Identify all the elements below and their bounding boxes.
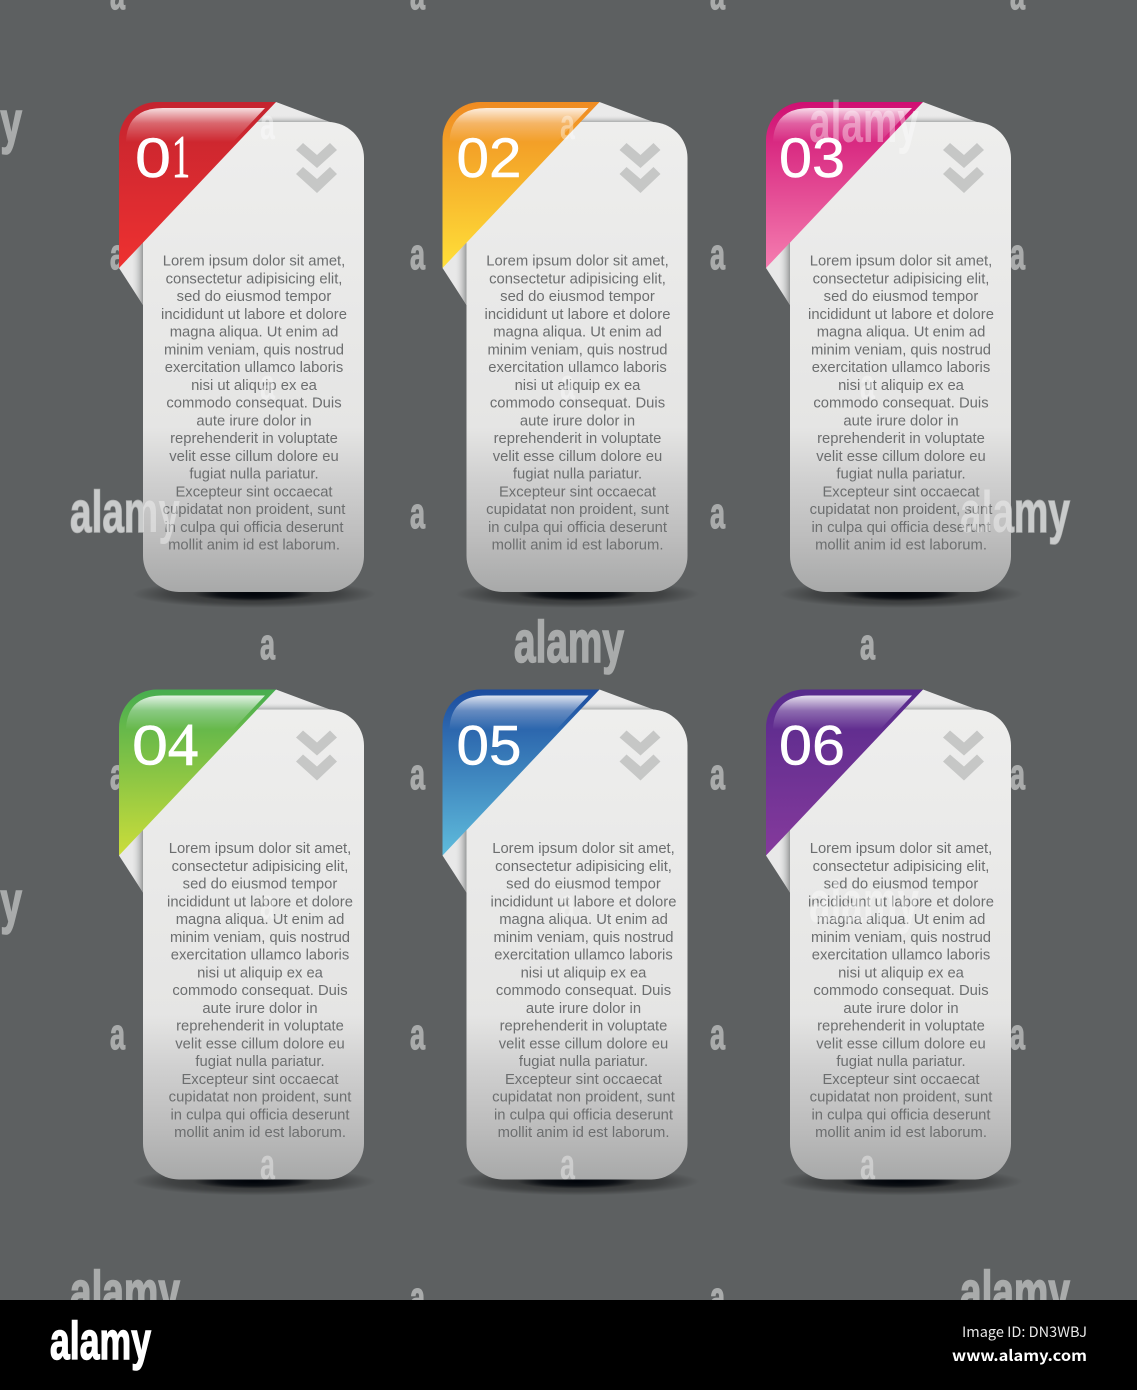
text 01: exercitation ullamco laboris xyxy=(165,360,343,376)
text 01: commodo consequat. Duis xyxy=(166,396,342,412)
watermarks behind cards: a xyxy=(110,1010,125,1059)
watermarks over cards: a xyxy=(260,1140,275,1189)
text 01: velit esse cillum dolore eu xyxy=(169,449,339,465)
text 01: magna aliqua. Ut enim ad xyxy=(170,324,338,340)
card 06 xyxy=(766,690,1023,1196)
card 03 xyxy=(766,102,1023,608)
ribbon 04: 4 xyxy=(168,712,198,778)
text 02: nisi ut aliquip ex ea xyxy=(515,378,641,394)
text 01: in culpa qui officia deserunt xyxy=(164,520,344,536)
watermarks behind cards: a xyxy=(1010,1010,1025,1059)
text 04: consectetur adipisicing elit, xyxy=(172,859,348,875)
text 06: velit esse cillum dolore eu xyxy=(816,1036,986,1052)
text 01: cupidatat non proident, sunt xyxy=(163,502,345,518)
text 06: Excepteur sint occaecat xyxy=(822,1072,980,1088)
text 02: commodo consequat. Duis xyxy=(490,396,665,412)
ribbon 06 xyxy=(766,690,923,856)
text 02: sed do eiusmod tempor xyxy=(500,289,655,305)
text 05: reprehenderit in voluptate xyxy=(500,1018,667,1034)
ribbon 02: 02 xyxy=(456,126,522,189)
watermarks over cards: a xyxy=(860,360,875,409)
text 05: sed do eiusmod tempor xyxy=(506,876,661,892)
ribbon 01: 1 xyxy=(172,124,190,190)
text 04: incididunt ut labore et dolore xyxy=(167,894,353,910)
text 03: reprehenderit in voluptate xyxy=(817,431,985,447)
ribbon 04: 0 xyxy=(132,714,168,776)
text 06: nisi ut aliquip ex ea xyxy=(838,965,965,981)
text 03: mollit anim id est laborum. xyxy=(815,538,987,554)
watermarks over cards: a xyxy=(260,100,275,149)
text 04: Excepteur sint occaecat xyxy=(181,1072,339,1088)
text 04: cupidatat non proident, sunt xyxy=(169,1090,351,1106)
watermarks behind cards: a xyxy=(410,230,425,279)
ribbon 02 xyxy=(442,102,600,268)
ribbon 01: 0 xyxy=(135,126,171,189)
watermarks behind cards: a xyxy=(710,1010,725,1059)
text 03: in culpa qui officia deserunt xyxy=(811,520,991,536)
text 06: mollit anim id est laborum. xyxy=(815,1125,987,1141)
chevrons 03 xyxy=(943,143,984,193)
text 06: reprehenderit in voluptate xyxy=(817,1018,985,1034)
text 04: mollit anim id est laborum. xyxy=(174,1125,346,1141)
text 02: aute irure dolor in xyxy=(520,413,635,429)
text 05: Excepteur sint occaecat xyxy=(505,1072,662,1088)
ribbon 05: 05 xyxy=(456,714,522,776)
text 04: reprehenderit in voluptate xyxy=(176,1018,344,1034)
card 04 xyxy=(119,690,376,1196)
watermarks behind cards: a xyxy=(710,489,725,538)
watermarks over cards: a xyxy=(560,880,575,929)
footer bar: www.alamy.com xyxy=(952,1345,1087,1366)
watermarks behind cards: a xyxy=(410,1010,425,1059)
watermarks over cards: alamy xyxy=(809,90,919,155)
text 01: Excepteur sint occaecat xyxy=(175,484,333,500)
card 05 xyxy=(442,690,700,1196)
text 01: mollit anim id est laborum. xyxy=(168,538,340,554)
chevrons 01 xyxy=(296,143,337,193)
text 03: aute irure dolor in xyxy=(843,413,959,429)
watermarks behind cards: alamy xyxy=(514,610,624,675)
watermarks behind cards: alamy xyxy=(70,1260,180,1325)
watermarks behind cards: a xyxy=(710,230,725,279)
text 04: Lorem ipsum dolor sit amet, xyxy=(169,841,351,857)
text 06: minim veniam, quis nostrud xyxy=(811,930,991,946)
text 01: Lorem ipsum dolor sit amet, xyxy=(163,254,345,270)
text 05: exercitation ullamco laboris xyxy=(494,948,673,964)
text 02: Lorem ipsum dolor sit amet, xyxy=(486,254,669,270)
chevrons 05 xyxy=(620,730,660,780)
text 06: exercitation ullamco laboris xyxy=(812,948,990,964)
text 04: velit esse cillum dolore eu xyxy=(175,1036,345,1052)
watermarks behind cards: a xyxy=(110,750,125,799)
text 03: minim veniam, quis nostrud xyxy=(811,342,991,358)
text 01: aute irure dolor in xyxy=(196,413,312,429)
text 06: Lorem ipsum dolor sit amet, xyxy=(810,841,992,857)
text 05: cupidatat non proident, sunt xyxy=(492,1090,675,1106)
text 03: magna aliqua. Ut enim ad xyxy=(817,324,985,340)
watermarks over cards: alamy xyxy=(960,480,1070,545)
text 05: fugiat nulla pariatur. xyxy=(519,1054,648,1070)
ribbon 05 xyxy=(442,690,600,856)
ribbon 03: 03 xyxy=(779,126,845,189)
text 02: cupidatat non proident, sunt xyxy=(486,502,669,518)
text 04: sed do eiusmod tempor xyxy=(183,876,337,892)
text 02: incididunt ut labore et dolore xyxy=(485,307,670,323)
text 04: commodo consequat. Duis xyxy=(172,983,348,999)
text 06: incididunt ut labore et dolore xyxy=(808,894,994,910)
text 03: fugiat nulla pariatur. xyxy=(836,466,966,482)
watermarks over cards: a xyxy=(260,360,275,409)
text 02: mollit anim id est laborum. xyxy=(492,538,663,554)
watermarks behind cards: a xyxy=(710,750,725,799)
text 04: magna aliqua. Ut enim ad xyxy=(176,912,344,928)
text 03: nisi ut aliquip ex ea xyxy=(838,378,965,394)
text 03: Lorem ipsum dolor sit amet, xyxy=(810,254,992,270)
text 01: incididunt ut labore et dolore xyxy=(161,307,347,323)
text 05: aute irure dolor in xyxy=(526,1001,641,1017)
watermarks behind cards: a xyxy=(710,1273,725,1322)
text 01: sed do eiusmod tempor xyxy=(177,289,331,305)
card 01 xyxy=(119,102,376,608)
text 04: in culpa qui officia deserunt xyxy=(170,1107,350,1123)
text 05: mollit anim id est laborum. xyxy=(498,1125,669,1141)
ribbon 03 xyxy=(766,102,923,268)
text 03: exercitation ullamco laboris xyxy=(812,360,990,376)
text 06: commodo consequat. Duis xyxy=(813,983,989,999)
text 03: sed do eiusmod tempor xyxy=(824,289,978,305)
footer bar: alamy xyxy=(50,1312,151,1371)
text 03: incididunt ut labore et dolore xyxy=(808,307,994,323)
watermarks behind cards: a xyxy=(410,750,425,799)
text 04: aute irure dolor in xyxy=(202,1001,318,1017)
text 06: aute irure dolor in xyxy=(843,1001,959,1017)
text 05: incididunt ut labore et dolore xyxy=(491,894,676,910)
card 02 xyxy=(442,102,700,608)
watermarks over cards xyxy=(70,90,1070,1189)
text 02: reprehenderit in voluptate xyxy=(494,431,661,447)
watermarks over cards: a xyxy=(560,360,575,409)
text 03: commodo consequat. Duis xyxy=(813,396,989,412)
chevrons 06 xyxy=(943,730,984,780)
watermarks behind cards: a xyxy=(1010,750,1025,799)
text 06: consectetur adipisicing elit, xyxy=(813,859,989,875)
watermarks over cards: a xyxy=(860,1140,875,1189)
text 01: minim veniam, quis nostrud xyxy=(164,342,344,358)
text 01: reprehenderit in voluptate xyxy=(170,431,338,447)
text 02: magna aliqua. Ut enim ad xyxy=(493,324,662,340)
text 03: consectetur adipisicing elit, xyxy=(813,271,989,287)
text 04: minim veniam, quis nostrud xyxy=(170,930,350,946)
footer bar xyxy=(0,1300,1137,1390)
text 01: fugiat nulla pariatur. xyxy=(189,466,319,482)
chevrons 04 xyxy=(296,730,337,780)
text 04: fugiat nulla pariatur. xyxy=(195,1054,325,1070)
text 02: velit esse cillum dolore eu xyxy=(493,449,662,465)
text 05: magna aliqua. Ut enim ad xyxy=(499,912,668,928)
chevrons 02 xyxy=(620,143,660,193)
ribbon 04 xyxy=(119,690,276,856)
watermarks behind cards: alamy xyxy=(960,1260,1070,1325)
text 03: Excepteur sint occaecat xyxy=(822,484,980,500)
watermarks behind cards: a xyxy=(410,489,425,538)
watermarks behind cards: a xyxy=(1010,230,1025,279)
text 05: nisi ut aliquip ex ea xyxy=(521,965,647,981)
watermarks behind cards: a xyxy=(860,620,875,669)
text 06: in culpa qui officia deserunt xyxy=(811,1107,991,1123)
text 03: velit esse cillum dolore eu xyxy=(816,449,986,465)
text 04: nisi ut aliquip ex ea xyxy=(197,965,324,981)
text 01: nisi ut aliquip ex ea xyxy=(191,378,318,394)
watermarks over cards: a xyxy=(260,880,275,929)
text 05: velit esse cillum dolore eu xyxy=(499,1036,668,1052)
text 02: exercitation ullamco laboris xyxy=(488,360,667,376)
text 05: minim veniam, quis nostrud xyxy=(493,930,674,946)
text 05: Lorem ipsum dolor sit amet, xyxy=(492,841,675,857)
text 05: consectetur adipisicing elit, xyxy=(495,859,672,875)
text 02: consectetur adipisicing elit, xyxy=(489,271,666,287)
text 02: Excepteur sint occaecat xyxy=(499,484,656,500)
text 06: sed do eiusmod tempor xyxy=(824,876,978,892)
footer bar: Image ID: DN3WBJ xyxy=(962,1321,1087,1342)
watermarks over cards: a xyxy=(560,100,575,149)
text 05: commodo consequat. Duis xyxy=(496,983,671,999)
text 06: cupidatat non proident, sunt xyxy=(810,1090,992,1106)
text 06: fugiat nulla pariatur. xyxy=(836,1054,966,1070)
text 05: in culpa qui officia deserunt xyxy=(494,1107,673,1123)
watermarks over cards: alamy xyxy=(70,480,180,545)
text 03: cupidatat non proident, sunt xyxy=(810,502,992,518)
watermarks over cards: a xyxy=(560,1140,575,1189)
text 01: consectetur adipisicing elit, xyxy=(166,271,342,287)
watermarks behind cards: a xyxy=(410,1273,425,1322)
ribbon 01 xyxy=(119,102,276,268)
text 02: in culpa qui officia deserunt xyxy=(488,520,667,536)
watermarks over cards: alamy xyxy=(809,870,919,935)
text 02: minim veniam, quis nostrud xyxy=(487,342,668,358)
watermarks behind cards: a xyxy=(260,620,275,669)
text 04: exercitation ullamco laboris xyxy=(171,948,349,964)
ribbon 06: 06 xyxy=(779,714,845,776)
watermarks behind cards: a xyxy=(110,230,125,279)
watermarks behind cards: alamy xyxy=(960,480,1070,545)
text 06: magna aliqua. Ut enim ad xyxy=(817,912,985,928)
watermarks behind cards: alamy xyxy=(70,480,180,545)
text 02: fugiat nulla pariatur. xyxy=(513,466,642,482)
